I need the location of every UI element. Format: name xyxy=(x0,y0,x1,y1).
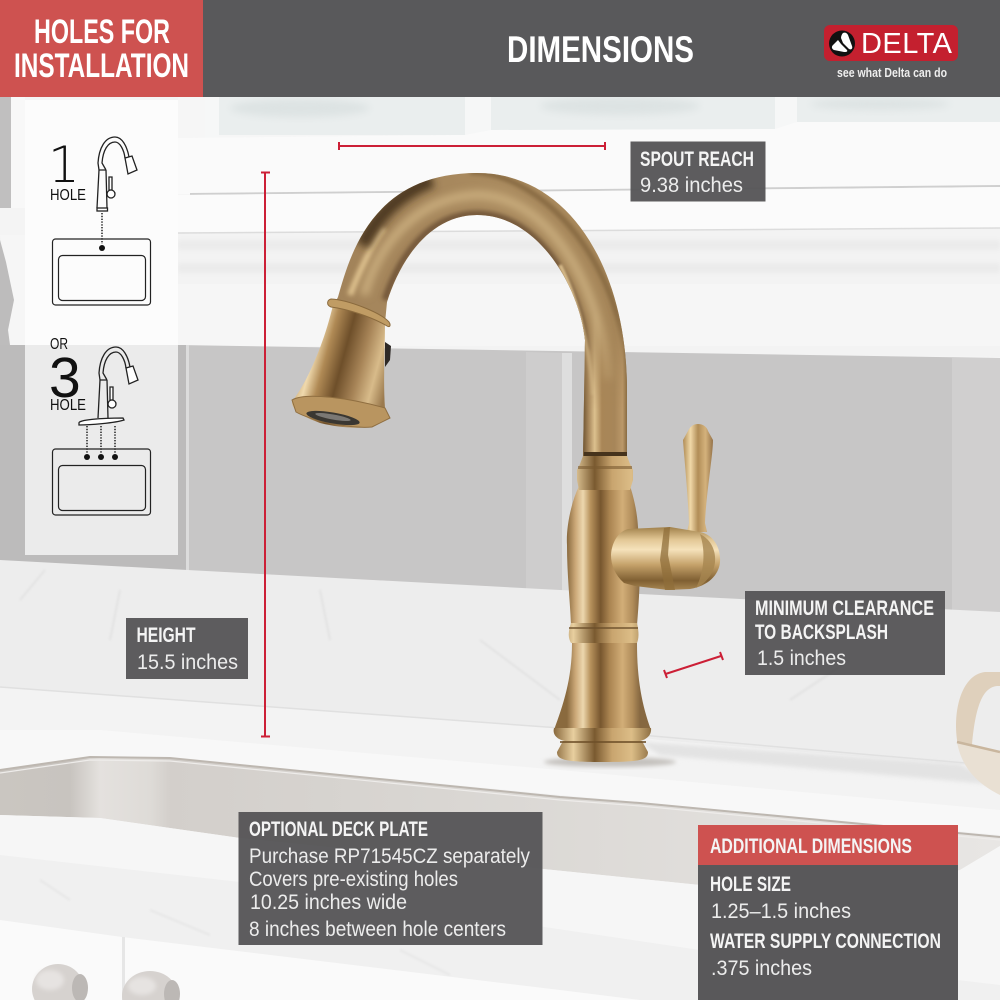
middle ring xyxy=(569,623,638,643)
callout: spout reach: SPOUT REACH xyxy=(640,148,754,171)
logo: DELTA xyxy=(861,28,953,60)
faucet shadow on counter xyxy=(544,757,676,767)
callout: optional deck plate: OPTIONAL DECK PLATE xyxy=(249,818,428,841)
top collar xyxy=(577,456,633,490)
arrow: backsplash clearance xyxy=(664,652,723,678)
panel: additional dimensions: .375 inches xyxy=(711,957,812,980)
brass bowl decoration xyxy=(956,672,1000,795)
heading bar xyxy=(698,825,958,865)
grey wall panels xyxy=(0,345,1000,640)
icon: 1 hole faucet xyxy=(97,137,137,211)
callout: optional deck plate: 10.25 inches wide xyxy=(250,891,407,914)
callout: height: 15.5 inches xyxy=(137,651,238,674)
1 hole label: HOLE xyxy=(50,187,86,204)
arrow: spout reach xyxy=(339,142,605,150)
riser dark band xyxy=(584,452,627,456)
panel: additional dimensions: 1.25–1.5 inches xyxy=(711,900,851,923)
callout: spout reach: 9.38 inches xyxy=(640,174,743,197)
3 hole label: HOLE xyxy=(50,397,86,414)
title: DIMENSIONS xyxy=(507,29,694,70)
1 hole label: 1 xyxy=(48,136,80,194)
header: holes for installation: INSTALLATION xyxy=(14,47,189,85)
panel: additional dimensions: ADDITIONAL DIMENSIONS xyxy=(710,835,912,858)
callout: minimum clearance: 1.5 inches xyxy=(757,647,846,670)
handle cylinder xyxy=(611,527,720,590)
countertop xyxy=(0,687,1000,840)
cabinet doors xyxy=(0,920,640,1000)
icon: 3 hole faucet with deck plate xyxy=(79,347,138,425)
arrow: height xyxy=(261,172,270,737)
sink basin xyxy=(0,757,1000,885)
marble backsplash xyxy=(0,560,1000,790)
faucet body xyxy=(554,456,651,762)
callout: height: HEIGHT xyxy=(136,624,196,647)
icon: 3 hole sink xyxy=(52,426,150,515)
lower countertop xyxy=(0,815,1000,1000)
callout: spout reach xyxy=(630,142,766,202)
lower body xyxy=(554,643,651,730)
header: holes for installation xyxy=(0,0,203,97)
callout: minimum clearance: MINIMUM CLEARANCE xyxy=(755,597,934,620)
callout: optional deck plate: 8 inches between hole centers xyxy=(249,918,506,941)
header: holes for installation: HOLES FOR xyxy=(34,13,170,51)
callout: minimum clearance: TO BACKSPLASH xyxy=(755,621,888,644)
base flange xyxy=(554,728,651,741)
callout: height xyxy=(126,618,248,679)
3 hole label: 3 xyxy=(49,346,81,410)
icon: 1 hole sink xyxy=(52,213,150,305)
callout: minimum clearance xyxy=(745,591,945,675)
callout: optional deck plate: Purchase RP71545CZ separately xyxy=(249,845,530,868)
nozzle xyxy=(305,408,361,428)
left cabinet and corbel xyxy=(0,97,178,357)
moulding xyxy=(178,228,1000,357)
cabinet knobs xyxy=(32,964,180,1000)
3 hole label: OR xyxy=(50,336,68,353)
panel: additional dimensions: HOLE SIZE xyxy=(710,873,791,896)
faucet xyxy=(292,172,720,767)
faucet spray head xyxy=(292,299,391,428)
panel: additional dimensions xyxy=(698,825,958,1000)
callout: optional deck plate xyxy=(238,812,542,945)
window glass xyxy=(219,97,1000,135)
trigger button xyxy=(385,342,391,367)
logo: see what Delta can do xyxy=(837,65,947,80)
panel: holes for installation xyxy=(25,100,178,555)
logo xyxy=(824,25,958,80)
nozzle flange xyxy=(292,396,390,427)
collar ring xyxy=(328,299,390,327)
callout: optional deck plate: Covers pre-existing holes xyxy=(249,868,458,891)
handle lever xyxy=(683,424,713,532)
window frame and sill xyxy=(178,122,1000,194)
header bar xyxy=(0,0,1000,97)
faucet spout xyxy=(333,172,630,460)
